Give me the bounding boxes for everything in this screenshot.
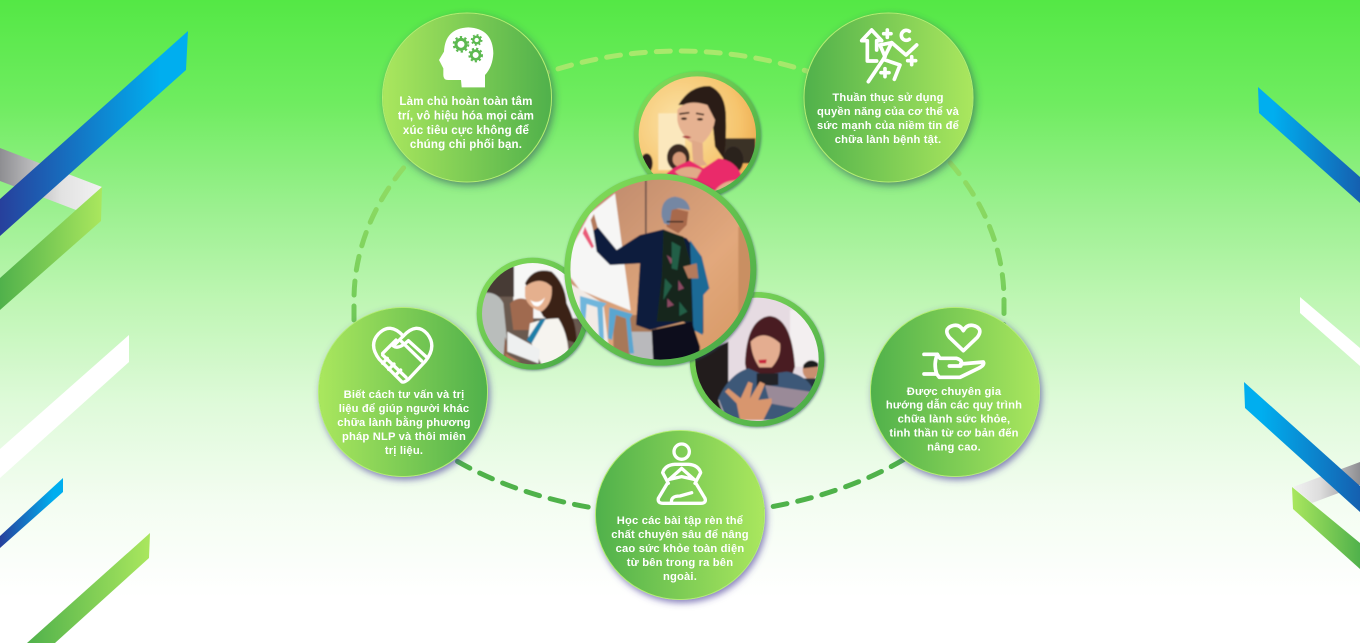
text: mind mastery: trí, vô hiệu hóa mọi cảm (398, 110, 534, 122)
icon: meditation figure (658, 444, 705, 503)
icon: hand holding heart (924, 325, 984, 377)
text: physical exercises: chất chuyên sâu để nâng (611, 529, 749, 541)
icon: head with gears (439, 27, 493, 87)
text: body power: quyền năng của cơ thể và (817, 106, 960, 118)
text: healing others: liệu để giúp người khác (339, 403, 469, 415)
text: body power: chữa lành bệnh tật. (835, 134, 941, 146)
text: body power: sức mạnh của niềm tin để (817, 120, 959, 132)
text: healing others: pháp NLP và thôi miên (342, 431, 466, 443)
text: mind mastery: xúc tiêu cực không để (403, 125, 529, 137)
photo: woman reading (690, 292, 824, 427)
text: mind mastery: chúng chi phối bạn. (410, 139, 522, 151)
text: expert guidance: Được chuyên gia (907, 386, 1002, 398)
text: physical exercises: ngoài. (663, 571, 697, 583)
text: physical exercises: Học các bài tập rèn thể (617, 515, 743, 527)
panel: physical exercises (596, 430, 764, 600)
photos cluster (477, 72, 824, 427)
text: physical exercises: từ bên trong ra bên (627, 557, 733, 569)
text: expert guidance: hướng dẫn các quy trình (886, 398, 1022, 412)
photo: smiling woman with notebook (477, 258, 589, 370)
text: body power: Thuần thục sử dụng (832, 92, 944, 104)
text: healing others: chữa lành bằng phương (337, 416, 471, 429)
photo: trainer at flipchart (564, 174, 757, 366)
icon: heart handshake (374, 328, 432, 382)
panel: body power (804, 13, 973, 182)
text: mind mastery: Làm chủ hoàn toàn tâm (399, 96, 533, 108)
panel: expert guidance (870, 308, 1040, 476)
text: expert guidance: tinh thần từ cơ bản đến (889, 428, 1019, 440)
text: healing others: Biết cách tư vấn và trị (344, 389, 464, 401)
left decorative ribbons (0, 31, 188, 643)
photo: woman in pink top (634, 72, 761, 198)
text: expert guidance: chữa lành sức khỏe, (898, 414, 1010, 426)
text: physical exercises: cao sức khỏe toàn diện (616, 543, 744, 555)
icon: runner with arrow (862, 30, 917, 82)
dashed connecting ring (354, 51, 1004, 515)
right decorative ribbons (1244, 87, 1360, 569)
text: healing others: trị liệu. (385, 445, 423, 457)
panel: healing others (318, 308, 488, 476)
text: expert guidance: nâng cao. (927, 442, 981, 454)
panel: mind mastery (382, 13, 552, 182)
